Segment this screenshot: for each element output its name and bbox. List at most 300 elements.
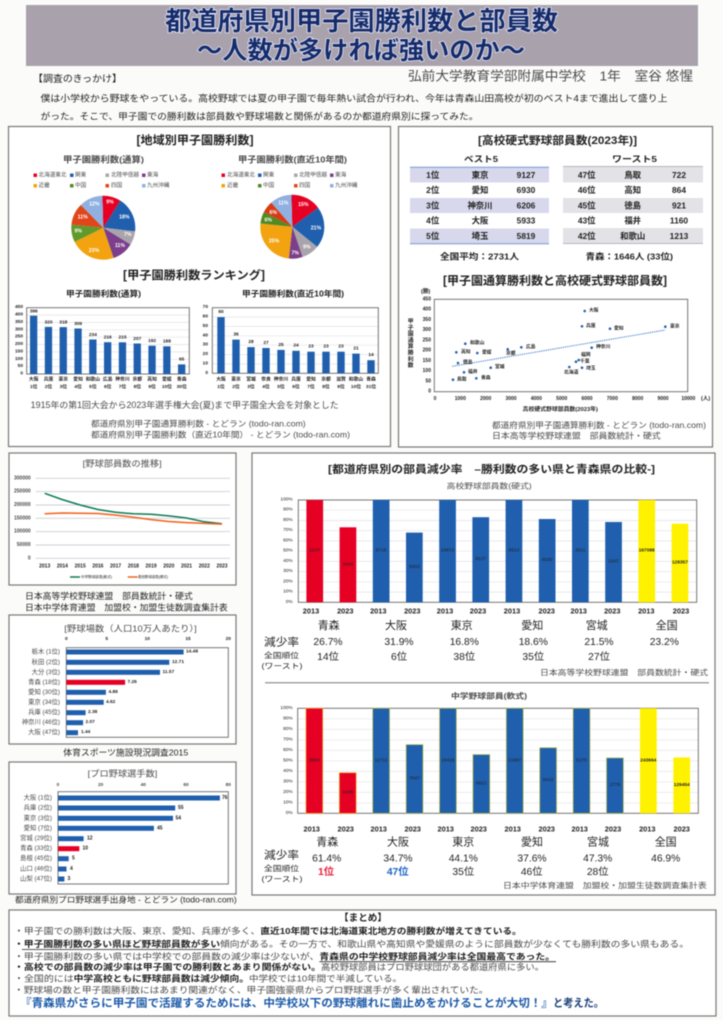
pie chart: last 10 years wins by region: 9% (303, 245, 311, 251)
stacked bars: junior high: 2023 (470, 824, 487, 834)
stacked bars: high school: 2023 (404, 606, 421, 616)
bar chart: last 10 years ranking: 20 (203, 351, 208, 357)
point labels: 東京 (670, 322, 680, 330)
legend: pie 1: 関東 (75, 170, 87, 178)
point labels: 徳島 (463, 358, 473, 366)
bar chart: all-time ranking: 200 (15, 341, 23, 347)
pie chart: last 10 years wins by region: 11% (278, 201, 289, 207)
stacked bars: junior high: 1539 (342, 790, 353, 796)
table: worst 5: 1213 (670, 231, 689, 241)
stacked bars: junior high: 129454 (674, 782, 690, 788)
bar chart: last 10 years ranking: 25 (278, 342, 284, 348)
axis labels: 通 (408, 336, 414, 344)
heading: ranking: [甲子園勝利数ランキング] (123, 268, 265, 282)
results: junior high: 28位 (587, 865, 609, 878)
table: worst 5: 徳島 (624, 200, 642, 210)
horizontal bar chart: ballparks: 15 (185, 636, 191, 642)
results: high school: 全国順位 (264, 651, 299, 660)
horizontal bar chart: ballparks: 2.07 (86, 719, 95, 725)
pie chart: all-time wins by region: 12% (89, 201, 100, 207)
pie chart: last 10 years wins by region: 21% (311, 225, 322, 231)
results: high school: 21.5% (584, 637, 614, 648)
pie chart: all-time wins by region (75, 200, 132, 254)
axis labels: 甲 (408, 318, 414, 325)
point labels: 京都 (506, 350, 516, 356)
bar chart: last 10 years ranking: 青森 (366, 376, 376, 382)
national average: 全国平均：2731人 (440, 252, 520, 262)
table: best 5: 1位 (426, 170, 440, 180)
stacked bars: junior high: 10% (283, 799, 293, 805)
point labels: 愛知 (614, 324, 624, 332)
bar chart: all-time ranking: 6位 (104, 383, 112, 390)
table: best 5: ベスト5 (464, 154, 498, 164)
stacked bars: high school: 30% (283, 568, 293, 574)
stacked bars: high school: 40% (283, 558, 293, 564)
legend: pie 1: 東海 (147, 170, 159, 178)
legend: pie 1: 中国 (75, 181, 87, 189)
subheading: high school: 高校野球部員数(硬式) (447, 482, 532, 490)
line chart: 2023 (216, 564, 228, 570)
stacked bars: high school (280, 496, 697, 616)
pie chart: last 10 years wins by region: 6% (265, 218, 272, 224)
heading: pro players: [プロ野球選手数] (88, 767, 157, 778)
stacked bars: high school: 128357 (672, 560, 688, 566)
axis labels: (人) (701, 396, 710, 402)
pie chart: last 10 years wins by region: 6% (270, 210, 277, 216)
bar chart: all-time ranking: 50 (18, 363, 23, 369)
sources: trend: 日本中学体育連盟 加盟校・加盟生徒数調査集計表 (25, 602, 228, 612)
legend: pie 2 (222, 170, 358, 189)
axis labels: 2000 (480, 396, 491, 402)
bar chart: last 10 years ranking: 4位 (262, 383, 270, 390)
stacked bars: high school: 90% (283, 507, 293, 513)
axis labels: 9000 (657, 396, 669, 402)
bar chart: last 10 years ranking (203, 304, 378, 390)
subheading: junior high: 中学野球部員(軟式) (451, 692, 528, 700)
stacked bars: junior high: 15425 (441, 757, 455, 763)
table: worst 5: 福井 (624, 216, 641, 226)
results: high school: 26.7% (313, 637, 343, 648)
axis labels: 50 (425, 378, 431, 384)
stacked bars: junior high: 2013 (303, 824, 320, 834)
stacked bars: junior high: 0% (286, 810, 293, 816)
bar chart: all-time ranking: 396 (30, 308, 38, 314)
point labels: 福井 (468, 368, 478, 375)
bar chart: last 10 years ranking: 50 (203, 323, 208, 329)
heading: summary: 【まとめ】 (339, 913, 387, 924)
title banner: 〜人数が多ければ強いのか〜 (197, 36, 525, 65)
axis labels: 園 (408, 331, 414, 338)
bar chart: all-time ranking: 5位 (89, 383, 97, 390)
pie chart: all-time wins by region: 23% (89, 248, 100, 254)
table: worst 5: 46位 (578, 185, 596, 195)
pie chart: all-time wins by region: 7% (124, 232, 132, 238)
stacked bars: junior high: 80% (283, 726, 293, 732)
line chart: 250000 (14, 489, 31, 495)
stacked bars: junior high: 70% (283, 736, 293, 742)
horizontal bar chart: pro players: 5 (72, 856, 75, 862)
horizontal bar chart: pro players (20, 782, 231, 884)
horizontal bar chart: ballparks: 20 (226, 636, 231, 642)
results: junior high: 全国 (655, 835, 677, 849)
axis labels: 1000 (455, 396, 466, 402)
bar chart: all-time ranking: 65 (179, 356, 185, 362)
bar chart: last 10 years ranking: 8位 (322, 383, 330, 390)
table: worst 5: 1160 (670, 216, 688, 226)
panel: pro players (9, 762, 236, 894)
table: worst 5: 43位 (578, 216, 596, 226)
bar chart: last 10 years ranking: 奈良 (261, 376, 271, 382)
horizontal bar chart: ballparks: 東京 (34位) (28, 697, 60, 706)
bar chart: all-time ranking: 150 (15, 348, 23, 354)
bar chart: last 10 years ranking: 6位 (292, 383, 300, 390)
table: best 5: 東京 (472, 170, 489, 180)
axis labels: 350 (423, 317, 431, 323)
bar chart: last 10 years ranking: 9位 (337, 383, 345, 390)
legend: 高校野球部員(硬式) (138, 574, 168, 579)
stacked bars: high school: 20% (283, 578, 293, 584)
results: junior high: 減少率 (264, 848, 299, 862)
horizontal bar chart: pro players: 45 (157, 825, 163, 831)
heading: decline rates: [都道府県別の部員減少率 –勝利数の多い県と青森県の比較-] (328, 462, 655, 475)
panel: summary (9, 910, 716, 1016)
horizontal bar chart: ballparks: 青森 (18位) (28, 677, 60, 686)
summary bullets: 青森県の中学校野球部員減少率は全国最高であった。 (319, 951, 555, 962)
axis labels: 勝 (408, 348, 414, 356)
horizontal bar chart: pro players: 20 (98, 782, 104, 788)
axis labels: 0 (428, 389, 431, 395)
point labels: 和歌山 (470, 339, 485, 346)
title banner: 都道府県別甲子園勝利数と部員数 (165, 6, 558, 36)
point labels: 宮城 (495, 363, 505, 370)
bar chart: last 10 years ranking: 14 (368, 352, 374, 358)
horizontal bar chart: pro players: 山口 (46位) (20, 864, 52, 872)
bar chart: last 10 years ranking: 10 (203, 360, 208, 366)
results: junior high: (ワースト) (262, 874, 302, 884)
bar chart: last 10 years ranking: 1位 (217, 383, 225, 390)
bar chart: last 10 years ranking: 27 (263, 340, 269, 346)
horizontal bar chart: ballparks: 7.26 (128, 679, 137, 685)
horizontal bar chart: pro players: 東京 (3位) (24, 813, 52, 822)
results: junior high (262, 835, 707, 890)
bar chart: last 10 years ranking: 兵庫 (291, 376, 301, 382)
stacked bars: junior high: 2013 (504, 824, 521, 834)
pie chart: all-time wins by region: 11% (78, 214, 88, 220)
table: worst 5: 722 (672, 170, 686, 180)
bar chart: all-time ranking: 京都 (132, 376, 142, 382)
table: best 5: 埼玉 (472, 231, 489, 241)
legend: pie 2: 北海道東北 (227, 170, 255, 178)
table: best 5: 5位 (426, 231, 440, 241)
horizontal bar chart: ballparks: 4.89 (108, 689, 118, 695)
scatter plot (408, 287, 710, 413)
stacked bars: high school: 80% (283, 517, 293, 523)
bar chart: last 10 years ranking: 28 (248, 339, 254, 345)
bar chart: all-time ranking: 1位 (30, 383, 38, 390)
stacked bars: high school: 2013 (303, 606, 319, 616)
stacked bars: junior high: 2023 (605, 824, 621, 834)
legend: pie 2: 東海 (335, 170, 347, 178)
results: junior high: 1位 (318, 865, 335, 878)
bar chart: last 10 years ranking: 31位 (366, 383, 376, 390)
bar chart: last 10 years ranking: 23 (338, 344, 344, 350)
bar chart: all-time ranking: 207 (133, 336, 142, 342)
pie chart: last 10 years wins by region: 7% (292, 250, 299, 256)
line chart: 2015 (75, 564, 86, 570)
summary bullets (14, 925, 689, 995)
legend: pie 2: 関東 (263, 170, 275, 178)
bar chart: last 10 years ranking: 滋賀 (336, 376, 346, 382)
stacked bars: junior high: 243664 (640, 757, 657, 763)
stacked bars: junior high: 3983 (309, 757, 320, 763)
point labels: 兵庫 (586, 322, 596, 329)
results: junior high: 46位 (521, 865, 543, 878)
bar chart: last 10 years ranking: 23 (323, 344, 329, 350)
horizontal bar chart: ballparks: 2.38 (88, 709, 98, 715)
results: high school: 愛知 (521, 618, 543, 632)
table: worst 5: 高知 (624, 185, 641, 195)
point labels: 高知 (461, 348, 471, 355)
axis labels: 150 (423, 358, 431, 364)
panel: player count trend (9, 453, 236, 585)
line chart: 2013 (39, 564, 50, 570)
horizontal bar chart: pro players: 島根 (45位) (20, 853, 52, 862)
stacked bars: junior high: 40% (283, 768, 293, 774)
table: best 5: 2位 (426, 185, 440, 195)
panel: regional wins and ranking (8, 126, 390, 446)
table: worst 5: 鳥取 (624, 170, 642, 180)
line chart: 100000 (14, 529, 31, 535)
stacked bars: junior high: 2023 (538, 824, 555, 834)
axis labels: 10000 (681, 396, 695, 402)
axis labels: 数 (408, 361, 414, 369)
panel: decline rates (252, 453, 715, 895)
stacked bars: high school: 9127 (475, 556, 486, 562)
bar chart: all-time ranking: 234 (89, 332, 97, 338)
bar chart: last 10 years ranking: 2位 (232, 383, 240, 390)
bar chart: all-time ranking: 7位 (119, 383, 126, 390)
summary bullets: ・甲子園での勝利数は大阪、東京、愛知、兵庫が多く、 (14, 925, 260, 936)
point labels: 愛媛 (482, 348, 492, 356)
results: high school: 16.8% (450, 637, 479, 648)
stacked bars: junior high: 20% (283, 789, 293, 795)
table: best 5: 6930 (517, 185, 536, 195)
horizontal bar chart: pro players: 宮城 (29位) (20, 833, 52, 842)
summary bullets: 高校野球部員はプロ野球球団がある都道府県に多い。 (321, 961, 544, 972)
horizontal bar chart: pro players: 3 (68, 876, 70, 882)
stacked bars: junior high: 11711 (375, 757, 388, 763)
horizontal bar chart: pro players: 4 (70, 866, 73, 872)
conclusion: 『青森県がさらに甲子園で活躍するためには、中学校以下の野球離れに歯止めをかけることが大切！』 (20, 996, 553, 1010)
horizontal bar chart: pro players: 青森 (33位) (20, 843, 52, 852)
summary bullets: 直近10年間では北海道東北地方の勝利数が増えてきている。 (260, 925, 522, 936)
legend: 中学野球部員(軟式) (81, 574, 112, 579)
line chart: 2021 (181, 564, 192, 570)
axis labels: 子 (408, 324, 414, 331)
stacked bars: high school: 6930 (542, 557, 553, 563)
horizontal bar chart: ballparks: 栃木 (1位) (32, 646, 60, 656)
table: best 5: 5819 (517, 231, 536, 241)
sources: scatter: 日本高等学校野球連盟 部員数統計・硬式 (492, 430, 661, 440)
table: worst 5: ワースト5 (612, 154, 657, 164)
results: high school: 6位 (391, 650, 407, 663)
axis labels: 5000 (556, 396, 567, 402)
line chart: 2020 (163, 564, 175, 570)
table: worst 5: 921 (672, 200, 686, 210)
table: worst 5: 864 (672, 185, 686, 195)
stacked bars: high school: 10972 (441, 548, 454, 554)
summary bullets: ・野球場の数と甲子園勝利数にはあまり関連がなく、甲子園強豪県からプロ野球選手が多く輩出されていた。 (14, 984, 488, 995)
line chart: 300000 (14, 475, 31, 481)
sources: trend (25, 591, 228, 612)
results: junior high: 47.3% (583, 854, 612, 864)
line chart: 2019 (146, 564, 157, 570)
pie chart: all-time wins by region: 11% (115, 243, 125, 249)
stacked bars: junior high: 30% (283, 778, 293, 784)
bar chart: all-time ranking: 100 (15, 356, 23, 362)
results: junior high: 日本中学体育連盟 加盟校・加盟生徒数調査集計表 (503, 880, 707, 890)
heading: trend: [野球部員数の推移] (83, 459, 162, 469)
source: pro players: 都道府県別プロ野球選手出身地 - とどラン (todo-ran.com) (15, 894, 237, 904)
horizontal bar chart: pro players: 10 (82, 846, 88, 852)
table: worst 5 (563, 154, 703, 244)
bar chart: all-time ranking: 250 (15, 334, 23, 340)
results: high school: 大阪 (385, 618, 407, 632)
pie chart: last 10 years wins by region: 25% (269, 239, 280, 245)
bar chart: all-time ranking: 30位 (177, 383, 187, 390)
Aomori figure: 青森：1646人 (33位) (586, 252, 673, 262)
horizontal bar chart: pro players: 76 (222, 795, 228, 801)
bar chart: last 10 years ranking: 23 (308, 344, 314, 350)
bar chart: last 10 years ranking: 21 (353, 346, 359, 352)
results: junior high: 大阪 (387, 835, 409, 849)
stacked bars: high school: 5933 (409, 564, 420, 570)
results: high school: 減少率 (264, 635, 299, 649)
bar chart: all-time ranking: 192 (148, 338, 156, 344)
scatter points (452, 310, 667, 381)
point labels: 青森 (481, 374, 491, 381)
legend: pie 2: 四国 (299, 182, 311, 189)
bar chart: all-time ranking (15, 304, 189, 390)
horizontal bar chart: ballparks: 大分 (3位) (32, 667, 60, 676)
stacked bars: high school: 2013 (437, 606, 453, 616)
bar chart: last 10 years ranking: 7位 (307, 383, 315, 390)
stacked bars: junior high: 2776 (610, 782, 621, 788)
table: worst 5: 45位 (578, 200, 596, 210)
results: junior high: 愛知 (521, 835, 543, 849)
stacked bars: high school: 2013 (504, 606, 520, 616)
line chart: 150000 (14, 515, 31, 521)
axis labels: 100 (423, 368, 431, 374)
stacked bars: high school: 2023 (604, 606, 621, 616)
bar chart: all-time ranking: 450 (15, 304, 23, 310)
bar chart: last 10 years ranking: 大阪 (216, 376, 226, 382)
horizontal bar chart: ballparks: 秋田 (2位) (32, 657, 60, 666)
bar chart: last 10 years ranking: 宮城 (246, 376, 256, 382)
horizontal bar chart: ballparks: 0 (65, 636, 68, 642)
axis labels (408, 287, 710, 413)
bar chart: all-time ranking: 4位 (74, 383, 82, 390)
bar chart: all-time ranking: 高知 (147, 376, 157, 382)
axis labels: 利 (408, 355, 414, 363)
bar chart: last 10 years ranking: 30 (203, 342, 208, 348)
bar chart: all-time ranking: 216 (104, 334, 112, 340)
table: worst 5: 和歌山 (620, 231, 645, 241)
bar chart: last 10 years ranking: 5位 (277, 383, 285, 390)
horizontal bar chart: ballparks: 10 (145, 636, 150, 642)
results: junior high: 全国順位 (264, 864, 299, 873)
pie chart: last 10 years wins by region: 15% (298, 202, 309, 208)
sources: wins (91, 418, 350, 440)
legend: pie 2: 中国 (263, 181, 275, 189)
stacked bars: high school: 2207 (608, 559, 619, 565)
bar chart: all-time ranking: 3位 (60, 383, 67, 390)
results: junior high: 47位 (387, 865, 409, 878)
horizontal bar chart: pro players: 12 (87, 836, 93, 842)
stacked bars: junior high: 2013 (571, 824, 588, 834)
results: junior high: 宮城 (587, 836, 609, 849)
results: high school: (ワースト) (262, 662, 302, 670)
horizontal bar chart: pro players: 54 (176, 815, 181, 821)
line chart: 2018 (128, 564, 139, 570)
stacked bars: high school: 0% (286, 599, 293, 605)
axis labels: 200 (423, 348, 431, 354)
pie chart: all-time wins by region: 18% (119, 215, 130, 221)
stacked bars: junior high: 8621 (476, 780, 487, 786)
sources: scatter: 都道府県別甲子園通算勝利数 - とどラン (todo-ran.com) (492, 420, 706, 430)
horizontal bar chart: ballparks: 神奈川 (46位) (22, 717, 60, 726)
subheading: ranking last 10 years: 甲子園勝利数(直近10年間) (242, 288, 344, 298)
stacked bars: high school: 2013 (570, 606, 587, 616)
table: best 5: 3位 (426, 200, 440, 210)
stacked bars: high school: 70% (283, 527, 293, 533)
title banner (26, 5, 698, 66)
horizontal bar chart: ballparks: 11.57 (162, 669, 175, 675)
stacked bars: junior high: 7647 (409, 776, 420, 782)
motivation text (40, 92, 668, 122)
summary bullets: 中学高校ともに野球部員数は減少傾向。 (74, 972, 249, 983)
bar chart: last 10 years ranking: 神奈川 (274, 376, 288, 382)
stacked bars: high school: 50% (283, 548, 293, 554)
results: high school: 18.6% (519, 637, 548, 648)
results: junior high: 東京 (452, 836, 474, 849)
horizontal bar chart: ballparks: 12.71 (172, 659, 184, 665)
legend: pie 1: 九州沖縄 (147, 181, 170, 189)
table: best 5: 4位 (426, 216, 440, 226)
bar chart: last 10 years ranking: 70 (203, 304, 208, 310)
legend: pie 1 (34, 170, 170, 189)
summary bullets: ・甲子園勝利数の多い県では中学校での部員数の減少率は少ないが、 (14, 951, 319, 962)
table: best 5: 大阪 (472, 216, 489, 226)
horizontal bar chart: ballparks: 14.48 (186, 648, 198, 654)
conclusion: と考えた。 (553, 997, 604, 1010)
bar chart: all-time ranking: 300 (15, 326, 23, 332)
results: high school: 日本高等学校野球連盟 部員数統計・硬式 (540, 667, 708, 677)
summary bullets: 傾向がある。その一方で、和歌山県や高知県や愛媛県のように部員数が少なくても勝利数の多い県もある。 (220, 938, 689, 949)
bar chart: last 10 years ranking: 東京 (231, 376, 241, 382)
summary bullets: 中学校では10年間で半減している。 (249, 972, 402, 983)
horizontal bar chart: ballparks: 5 (105, 636, 108, 642)
results: high school: 27位 (588, 650, 610, 663)
table: best 5: 5933 (517, 216, 536, 226)
bar chart: all-time ranking: 320 (44, 320, 53, 326)
point labels: 福岡 (581, 351, 591, 358)
axis labels: 8000 (632, 396, 643, 402)
point labels: 北海道 (564, 368, 579, 376)
bar chart: last 10 years ranking: 和歌山 (349, 376, 363, 382)
stacked bars: high school: 10% (283, 589, 293, 595)
results: junior high: 46.9% (651, 854, 680, 864)
